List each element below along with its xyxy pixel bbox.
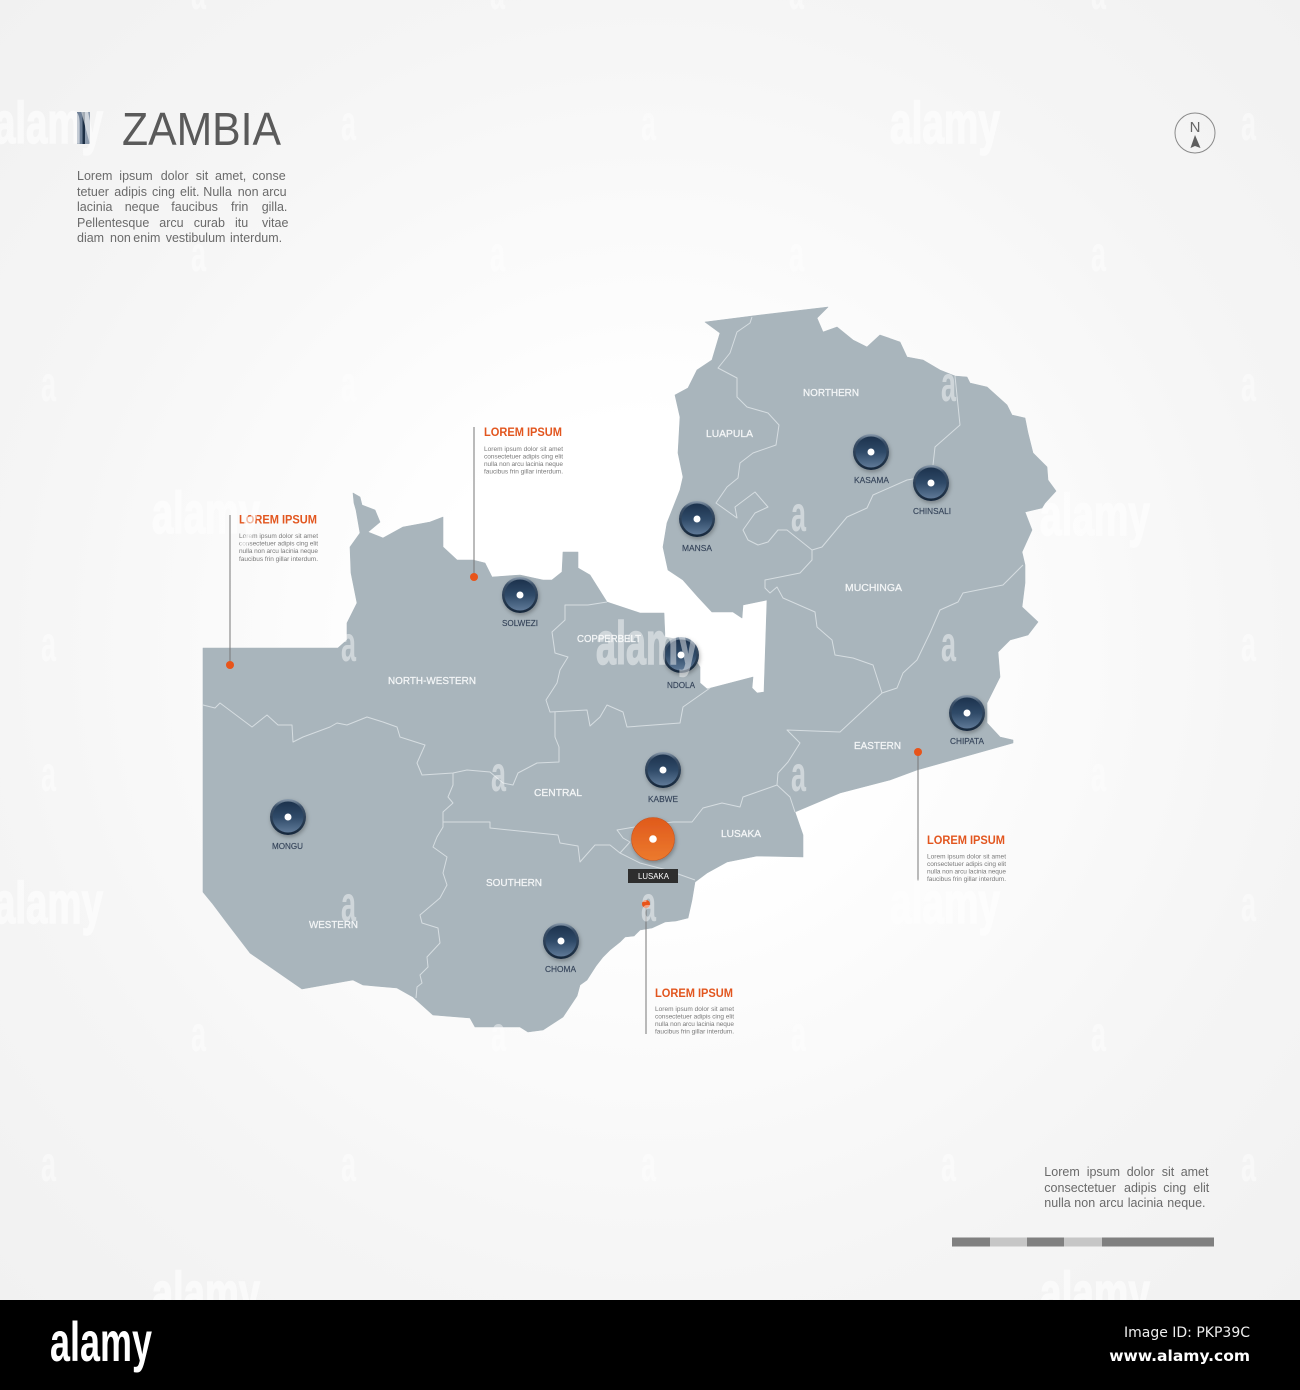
watermarks: a	[341, 616, 357, 672]
watermarks: a	[1241, 1136, 1257, 1192]
watermarks: alamy	[152, 1261, 260, 1326]
title: ZAMBIA	[122, 103, 281, 155]
intro text: arcu	[159, 216, 184, 230]
watermarks: a	[641, 876, 657, 932]
watermarks: alamy	[890, 91, 1000, 156]
callout: bottom	[642, 900, 734, 1036]
callout: right: consectetuer adipis cing elit	[927, 861, 1006, 868]
intro text: ipsum	[119, 169, 153, 183]
intro text: vitae	[262, 216, 288, 230]
callout: right: Lorem ipsum dolor sit amet	[927, 854, 1006, 860]
watermarks: a	[789, 226, 805, 282]
intro text: Nulla	[203, 185, 232, 199]
intro text: lacinia	[77, 200, 112, 214]
intro text: non	[110, 231, 131, 245]
watermarks: a	[41, 616, 57, 672]
country silhouette	[203, 307, 1056, 1032]
watermarks: a	[641, 95, 657, 151]
watermarks: a	[1091, 746, 1107, 802]
icon: north compass	[1175, 113, 1215, 153]
city pin: Chinsali	[913, 465, 951, 516]
callout: bottom: faucibus frin gillar interdum.	[655, 1028, 734, 1036]
watermarks: a	[941, 616, 957, 672]
icon: north compass: N	[1190, 119, 1200, 136]
region labels: COPPERBELT	[577, 633, 642, 645]
city pin: Mongu: MONGU	[272, 841, 303, 851]
region labels: LUSAKA	[721, 828, 761, 840]
region labels: SOUTHERN	[486, 877, 542, 889]
watermarks: a	[1241, 356, 1257, 412]
watermarks: a	[1241, 616, 1257, 672]
bottom text: adipis	[1124, 1181, 1157, 1195]
city pin: Kasama: KASAMA	[854, 475, 889, 485]
bottom text: neque.	[1167, 1196, 1206, 1210]
watermarks: a	[41, 356, 57, 412]
watermarks: a	[791, 746, 807, 802]
callout: top-centre: consectetuer adipis cing elit	[484, 454, 563, 460]
watermarks: alamy	[1040, 1261, 1150, 1326]
intro text: tetuer	[77, 185, 109, 199]
callout: right: LOREM IPSUM	[927, 833, 1005, 847]
intro text: frin	[231, 200, 248, 214]
callout: bottom: Lorem ipsum dolor sit amet	[655, 1006, 734, 1013]
callout: top-centre: faucibus frin gillar interdum.	[484, 468, 563, 476]
scale bar	[952, 1238, 1214, 1246]
watermarks: a	[641, 356, 657, 412]
callout: right: nulla non arcu lacinia neque	[927, 868, 1006, 876]
region labels: EASTERN	[854, 740, 901, 752]
intro text: gilla.	[262, 200, 287, 214]
bottom text: consectetuer	[1044, 1181, 1116, 1195]
callout: top-left: LOREM IPSUM	[239, 512, 317, 526]
intro text: elit.	[180, 185, 199, 199]
callout: bottom: LOREM IPSUM	[655, 986, 733, 1000]
watermarks: a	[341, 1136, 357, 1192]
watermarks: a	[1091, 226, 1107, 282]
bottom text: sit	[1162, 1165, 1175, 1179]
capital pin: Lusaka	[628, 818, 678, 883]
watermarks: a	[791, 1006, 807, 1062]
watermarks: a	[941, 356, 957, 412]
bottom text: lacinia	[1128, 1196, 1163, 1210]
intro text: itu	[235, 216, 248, 230]
watermarks: a	[41, 1136, 57, 1192]
callout: top-left: consectetuer adipis cing elit	[239, 540, 318, 548]
capital pin: Lusaka: LUSAKA	[638, 871, 669, 881]
intro text: enim	[133, 231, 160, 245]
watermarks: alamy	[890, 871, 1000, 936]
city pin: Choma	[543, 923, 579, 974]
intro text: curab	[194, 216, 225, 230]
callout: bottom: consectetuer adipis cing elit	[655, 1014, 734, 1020]
intro text: amet,	[215, 169, 246, 183]
intro text	[77, 169, 288, 245]
bottom text: amet	[1181, 1165, 1209, 1179]
city pin: Solwezi	[502, 577, 538, 628]
region labels	[309, 387, 902, 931]
intro text: faucibus	[171, 200, 218, 214]
watermarks: a	[341, 876, 357, 932]
callout: right: faucibus frin gillar interdum.	[927, 876, 1006, 883]
intro text: adipis	[114, 185, 147, 199]
bottom text: Lorem	[1044, 1165, 1080, 1179]
intro text: non	[238, 185, 259, 199]
city pin: Ndola	[663, 637, 699, 690]
callout: top-centre: Lorem ipsum dolor sit amet	[484, 446, 563, 453]
footer image id: Image ID: PKP39C	[1124, 1325, 1250, 1341]
watermarks: a	[191, 1006, 207, 1062]
footer url: www.alamy.com	[1109, 1347, 1250, 1365]
intro text: Pellentesque	[77, 216, 149, 230]
watermarks: a	[491, 486, 507, 542]
callout: bottom: nulla non arcu lacinia neque	[655, 1021, 734, 1028]
watermarks: alamy	[1040, 483, 1150, 548]
intro text: sit	[196, 169, 209, 183]
watermarks: a	[491, 746, 507, 802]
bottom text: cing	[1163, 1181, 1186, 1195]
callout: top-centre: LOREM IPSUM	[484, 425, 562, 439]
region labels: WESTERN	[309, 919, 358, 931]
callout: top-left: faucibus frin gillar interdum.	[239, 556, 318, 563]
watermarks: a	[1091, 1006, 1107, 1062]
map: Zambia	[203, 307, 1056, 1032]
region labels: LUAPULA	[706, 428, 753, 440]
intro text: Lorem	[77, 169, 112, 183]
intro text: neque	[125, 200, 160, 214]
region labels: NORTHERN	[803, 387, 859, 399]
city pin: Chipata	[949, 695, 985, 746]
intro text: vestibulum	[166, 231, 225, 245]
bottom text: ipsum	[1087, 1165, 1120, 1179]
watermarks: alamy	[152, 481, 260, 546]
city pin: Kabwe	[645, 752, 681, 804]
city pin: Solwezi: SOLWEZI	[502, 618, 538, 628]
provincial boundaries	[203, 317, 1023, 998]
watermarks: a	[191, 226, 207, 282]
city pin: Kasama	[853, 434, 889, 485]
callout: top-centre	[470, 425, 563, 581]
intro text: dolor	[161, 169, 188, 183]
watermarks: a	[41, 746, 57, 802]
bottom text: elit	[1193, 1181, 1210, 1195]
bottom text	[1044, 1165, 1210, 1210]
footer logo: alamy	[50, 1310, 152, 1373]
watermarks: a	[1241, 95, 1257, 151]
watermarks: a	[490, 226, 506, 282]
bottom text: arcu	[1099, 1196, 1124, 1210]
city pin: Choma: CHOMA	[545, 964, 576, 974]
watermarks: a	[641, 1136, 657, 1192]
intro text: diam	[77, 231, 104, 245]
intro text: arcu	[262, 185, 287, 199]
intro text: conse	[252, 169, 286, 183]
region labels: MUCHINGA	[845, 582, 902, 594]
watermarks: a	[341, 356, 357, 412]
city pin: Kabwe: KABWE	[648, 794, 678, 804]
bottom text: nulla	[1044, 1196, 1071, 1210]
callout: top-left: Lorem ipsum dolor sit amet	[239, 533, 318, 540]
region labels: NORTH-WESTERN	[388, 675, 476, 687]
watermarks: a	[1241, 876, 1257, 932]
city pin: Ndola: NDOLA	[667, 680, 695, 690]
callout: right	[914, 748, 1006, 883]
watermarks: a	[791, 486, 807, 542]
city pin: Mongu	[270, 799, 306, 851]
bottom text: dolor	[1127, 1165, 1154, 1179]
bottom text: non	[1074, 1196, 1095, 1210]
intro text: interdum.	[230, 231, 282, 245]
footer bar	[0, 1300, 1300, 1390]
watermarks: a	[941, 1136, 957, 1192]
intro text: cing	[152, 185, 175, 199]
city pin: Mansa: MANSA	[682, 543, 712, 553]
callout: top-left	[226, 512, 318, 669]
city pin: Chipata: CHIPATA	[950, 736, 984, 746]
callout: top-centre: nulla non arcu lacinia neque	[484, 461, 563, 468]
watermarks: a	[341, 95, 357, 151]
region labels: CENTRAL	[534, 787, 582, 799]
title icon	[77, 112, 90, 144]
watermarks: a	[491, 1006, 507, 1062]
watermarks: alamy	[596, 610, 698, 677]
city pin: Mansa	[679, 501, 715, 553]
city pin: Chinsali: CHINSALI	[913, 506, 951, 516]
callout: top-left: nulla non arcu lacinia neque	[239, 548, 318, 555]
